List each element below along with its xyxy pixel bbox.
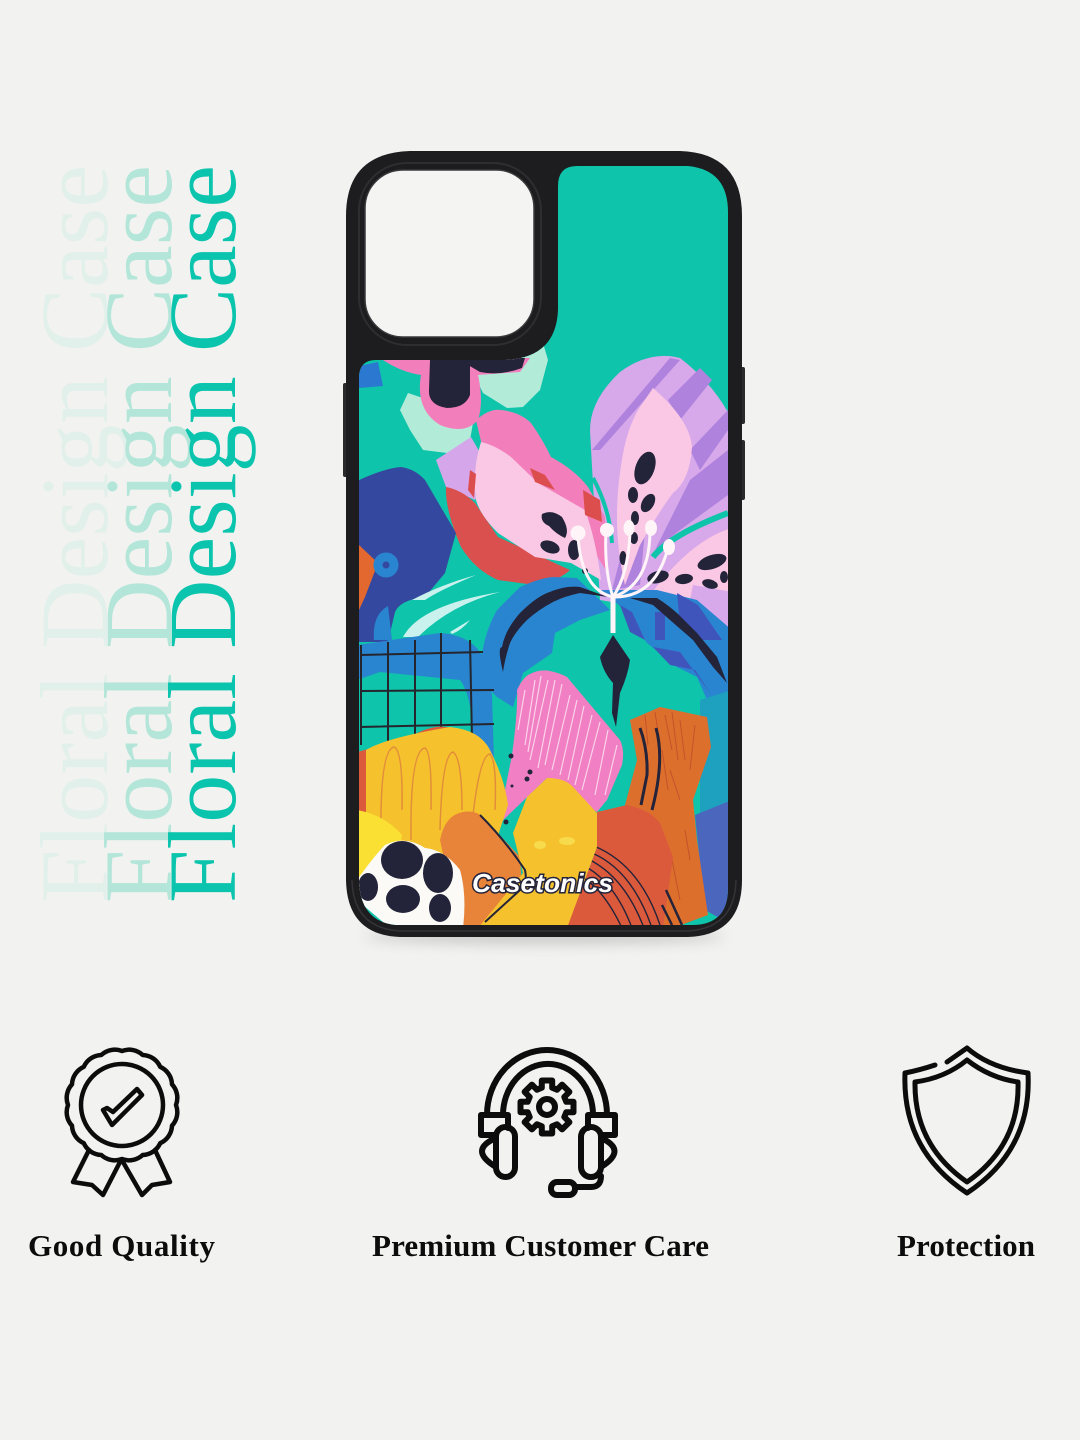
- petal spots: [620, 449, 728, 590]
- navy blob: [357, 467, 456, 642]
- phone case: [343, 151, 745, 943]
- right blue texture: [700, 691, 728, 813]
- side buttons: [343, 367, 745, 500]
- pink textured petal: [498, 670, 623, 825]
- icon: rosette badge: [67, 1050, 177, 1195]
- feature: good quality: [28, 1050, 216, 1263]
- feature: premium customer care: [372, 1050, 709, 1263]
- label: Good Quality: [28, 1228, 216, 1263]
- camera cutout: [365, 170, 534, 337]
- left pink flower: [436, 410, 606, 585]
- bright yellow corner: [357, 810, 402, 890]
- case rim highlight: [352, 880, 736, 931]
- brand logo: Casetonics: [472, 868, 613, 898]
- orange tall petal: [625, 707, 711, 928]
- mid title: Floral Design Case: [85, 165, 192, 903]
- blue arch: [480, 577, 732, 727]
- red petal: [565, 805, 682, 928]
- label: Protection: [897, 1228, 1035, 1263]
- label: Premium Customer Care: [372, 1228, 709, 1263]
- orange blob: [440, 812, 522, 925]
- heading: repeated vertical title: [21, 165, 256, 903]
- icon: headset with gear: [481, 1050, 615, 1195]
- case shadow: [365, 929, 725, 943]
- large lavender petal: [590, 356, 732, 640]
- white streaks: [403, 575, 500, 637]
- top flower: [359, 343, 548, 453]
- camera bump edge: [359, 163, 541, 345]
- infographic canvas: [30, 151, 1035, 1262]
- yellow centre petal: [478, 778, 597, 928]
- white stamens: [570, 520, 675, 633]
- yellow arch flower: [357, 727, 508, 860]
- artwork panel: [350, 160, 740, 940]
- faint title: Floral Design Case: [21, 165, 128, 903]
- main title: Floral Design Case: [149, 165, 256, 903]
- spotted white flower: [357, 841, 464, 928]
- teal background: [350, 160, 740, 940]
- icon: shield: [905, 1048, 1028, 1193]
- orange blob outline: [480, 815, 526, 922]
- grid panel: [357, 633, 494, 760]
- feature: protection: [897, 1048, 1035, 1263]
- case body: [346, 151, 742, 937]
